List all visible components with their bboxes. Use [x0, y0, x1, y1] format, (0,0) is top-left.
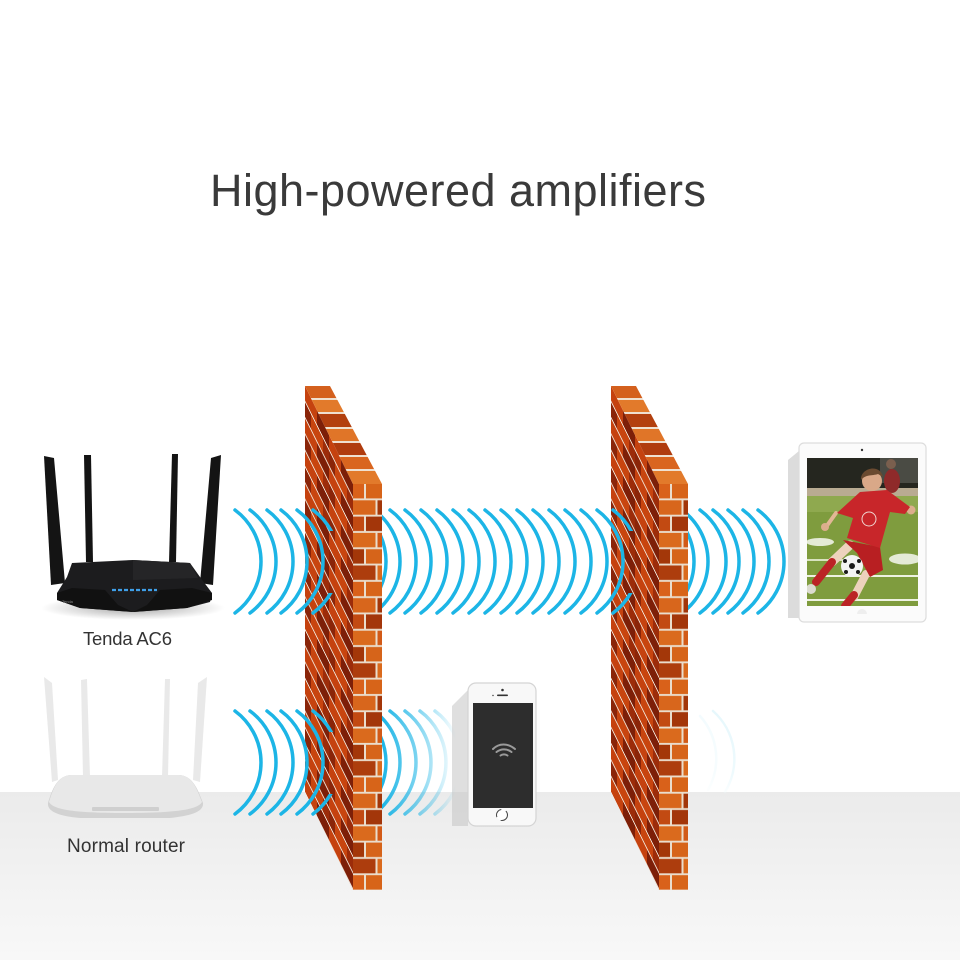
player arms	[826, 513, 836, 527]
player shorts	[843, 540, 883, 577]
slot	[92, 807, 159, 811]
icon: Tenda AC6 router	[41, 454, 225, 620]
signal waves: Tenda AC6 before first wall	[235, 510, 339, 613]
signal waves: normal router fading after first wall	[382, 709, 452, 816]
screen	[473, 703, 533, 808]
icon: tablet with football photo	[788, 443, 926, 622]
floor band	[0, 792, 960, 960]
home button	[496, 810, 508, 820]
router body	[57, 560, 212, 612]
icon: wifi	[493, 744, 515, 756]
antennas	[44, 454, 221, 585]
icon: normal router	[44, 677, 207, 818]
photo	[806, 458, 921, 606]
title: High-powered amplifiers	[210, 165, 706, 216]
signal waves: Tenda AC6 between walls	[360, 510, 639, 613]
signal waves: normal router before first wall	[235, 711, 339, 814]
brick wall left	[305, 386, 385, 890]
label: Tenda AC6: Tenda AC6	[83, 628, 172, 649]
brick wall right	[611, 386, 691, 890]
LED strip	[112, 589, 157, 591]
tablet body	[799, 443, 926, 622]
antennas	[44, 677, 207, 782]
side shadow	[452, 690, 468, 826]
football	[841, 555, 863, 577]
side shadow	[788, 451, 799, 618]
home button	[857, 609, 867, 614]
background player	[884, 469, 900, 493]
camera	[861, 449, 863, 451]
icon: smartphone	[452, 683, 536, 826]
router shadow	[41, 596, 225, 620]
router body	[48, 775, 203, 818]
signal waves: faint remnant after second wall	[700, 711, 734, 792]
player head	[862, 474, 882, 491]
phone body	[468, 683, 536, 826]
signal waves: Tenda AC6 after second wall	[688, 508, 786, 615]
brand mark: Tenda	[62, 599, 74, 604]
speaker and camera	[501, 689, 504, 691]
label: normal router: Normal router	[67, 836, 186, 857]
player jersey	[837, 490, 910, 548]
field markings	[806, 538, 834, 546]
player legs	[832, 545, 850, 562]
